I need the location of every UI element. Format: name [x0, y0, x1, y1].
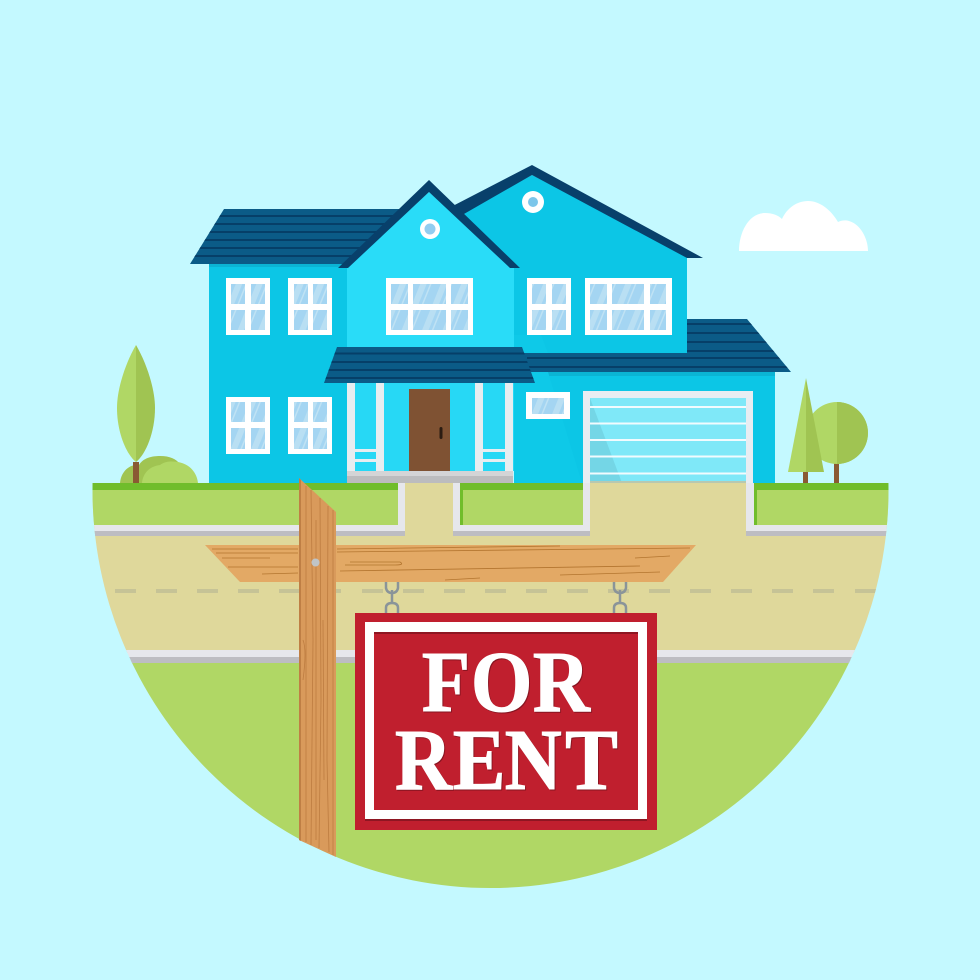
lower curb — [90, 650, 890, 663]
road and driveway — [92, 483, 889, 653]
house — [190, 165, 800, 483]
front door — [409, 389, 450, 471]
sign text: rent: RENT — [395, 712, 618, 808]
right chain — [614, 582, 626, 613]
right trees — [788, 378, 868, 483]
gable vent right — [522, 191, 544, 213]
garage wall — [514, 372, 775, 483]
garage door — [583, 391, 753, 483]
centre wide window — [386, 278, 473, 335]
for rent sign — [355, 613, 657, 830]
left lawn — [92, 483, 398, 525]
left chain — [386, 582, 398, 613]
lower window 2 — [288, 397, 332, 454]
porch step — [347, 471, 513, 483]
wooden sign crossbeam — [205, 545, 696, 582]
right wing wall highlight — [514, 335, 548, 353]
gable vent left — [420, 219, 440, 239]
cloud — [739, 201, 868, 251]
for rent house illustration — [92, 165, 888, 888]
road centre dashes — [115, 589, 876, 593]
right wide window — [585, 278, 672, 335]
right lawn — [754, 483, 889, 525]
upper curbs — [90, 483, 891, 536]
garage roof — [515, 319, 800, 372]
left tree and bushes — [117, 345, 198, 483]
small garage-side window — [526, 392, 570, 419]
porch roof — [320, 347, 540, 383]
upper window 2 — [288, 278, 332, 335]
porch columns and rails — [347, 347, 514, 471]
lower lawn — [130, 660, 850, 888]
upper window 1 — [226, 278, 270, 335]
centre gable roof edge — [338, 180, 520, 268]
right wing upper wall — [450, 175, 687, 353]
centre gable wall — [347, 192, 514, 347]
left wing wall — [209, 264, 347, 483]
post bolt — [312, 558, 320, 566]
wooden sign post — [299, 478, 336, 857]
centre lawn — [460, 483, 583, 525]
left wing roof — [190, 209, 430, 267]
right window small — [527, 278, 571, 335]
right wing roof edge — [445, 165, 703, 258]
lower window 1 — [226, 397, 270, 454]
ground circle — [80, 483, 900, 900]
sign text: for: FOR — [422, 634, 591, 730]
